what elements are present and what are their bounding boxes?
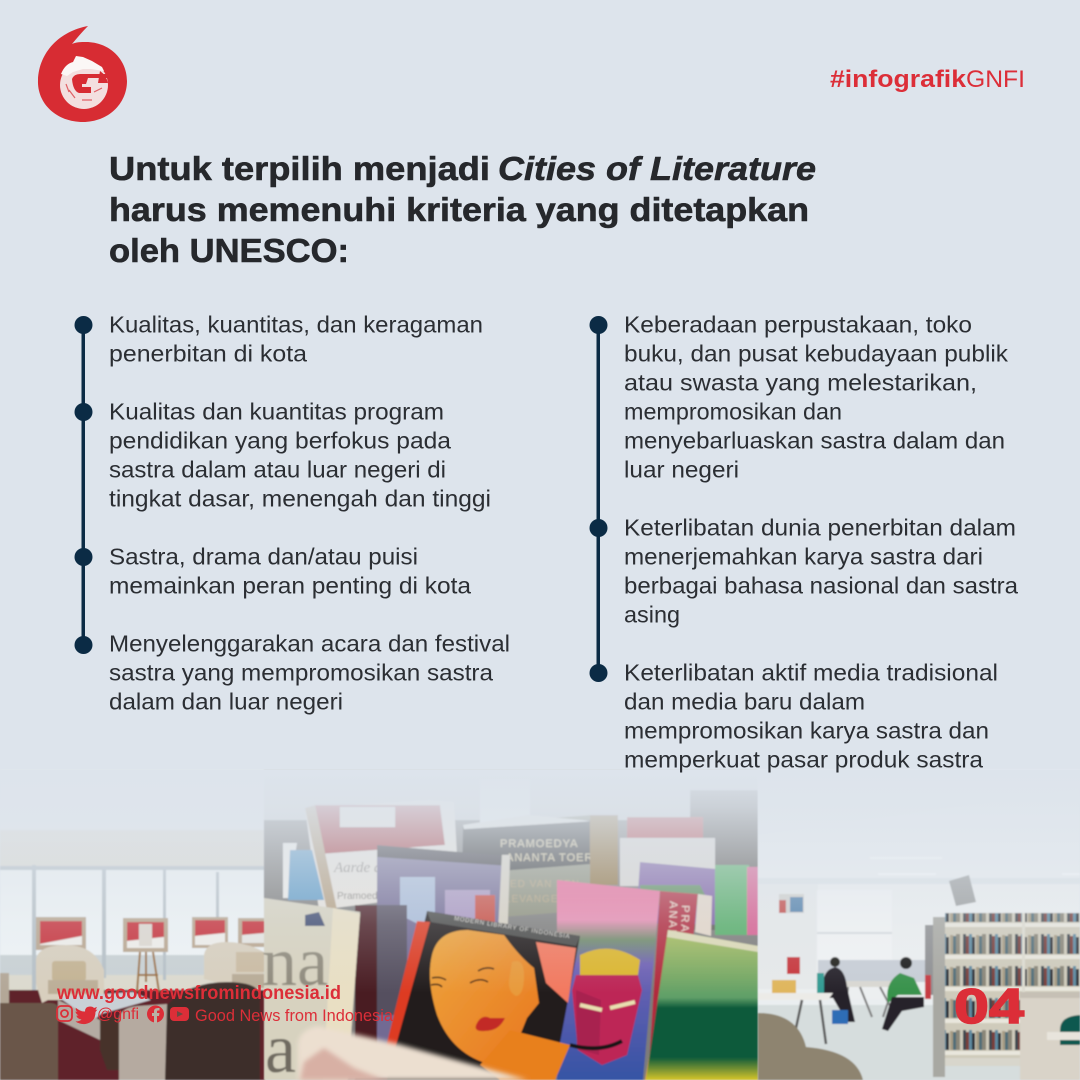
criteria: libraries: buku, dan pusat kebudayaan publik (624, 340, 1008, 366)
criteria: events: Menyelenggarakan acara dan festival (109, 630, 510, 656)
page number: 04 (954, 980, 1024, 1034)
readers at table (817, 957, 931, 1031)
social footer (57, 1006, 394, 1025)
criteria: libraries: luar negeri (624, 456, 739, 482)
ceiling lights (870, 858, 1080, 874)
book: grey Pramoedya: ED VAN EEN (510, 879, 580, 890)
criteria: role of literature: Sastra, drama dan/atau puisi (109, 543, 418, 569)
photo: books: PRA (678, 905, 691, 934)
criteria: translation: menerjemahkan karya sastra dari (624, 543, 983, 569)
criteria: libraries: menyebarluaskan sastra dalam dan (624, 427, 1005, 453)
book: grey Pramoedya: LEVANGENE (505, 894, 574, 905)
website url: www.goodnewsfromindonesia.id (56, 983, 341, 1004)
book: woman (382, 911, 580, 1080)
criteria: libraries (624, 311, 1008, 482)
foreground chairs (0, 1003, 58, 1080)
photo: books: ANAN (666, 901, 679, 940)
timeline: right (590, 316, 608, 682)
photo: lounge with paintings (0, 770, 265, 1080)
photo: books (262, 770, 758, 1080)
criteria: libraries: mempromosikan dan (624, 398, 842, 424)
criteria: education: tingkat dasar, menengah dan tinggi (109, 485, 491, 511)
criteria: libraries: Keberadaan perpustakaan, toko (624, 311, 972, 337)
criteria: education (109, 398, 491, 511)
criteria: events: sastra yang mempromosikan sastra (109, 659, 494, 685)
painting 1 (36, 917, 86, 950)
timeline: left (74, 316, 92, 654)
criteria: media: dan media baru dalam (624, 688, 865, 714)
criteria: events: dalam dan luar negeri (109, 688, 343, 714)
criteria: role of literature (109, 543, 472, 598)
bookshelves (925, 913, 1080, 1077)
criteria: translation (624, 514, 1019, 627)
shelf cubes (779, 894, 804, 974)
desks and stool (758, 980, 1080, 1080)
criteria: media: Keterlibatan aktif media tradisional (624, 659, 998, 685)
armchairs (36, 945, 104, 1003)
icon: facebook (147, 1006, 164, 1023)
logo (38, 26, 127, 122)
photo: library (758, 770, 1080, 1080)
criteria: publishing: penerbitan di kota (109, 340, 308, 366)
book: cream cover (262, 898, 360, 1080)
channel name: Good News from Indonesia (195, 1006, 394, 1025)
hashtag: GNFI (966, 66, 1025, 93)
criteria: education: sastra dalam atau luar negeri di (109, 456, 446, 482)
title: Untuk terpilih menjadi (109, 151, 490, 188)
book: white Aarde (283, 800, 459, 910)
book: cream cover: na (262, 924, 328, 1001)
painting 2 (123, 918, 168, 952)
criteria: translation: berbagai bahasa nasional dan sastra (624, 572, 1019, 598)
criteria: publishing: Kualitas, kuantitas, dan keragaman (109, 311, 483, 337)
book: grey Pramoedya (462, 815, 593, 920)
criteria: media: mempromosikan karya sastra dan (624, 717, 989, 743)
criteria: media (624, 659, 998, 772)
criteria: events (109, 630, 510, 714)
hashtag (830, 66, 1025, 93)
easel (137, 952, 159, 992)
book: mask (557, 880, 660, 1080)
criteria: role of literature: memainkan peran penting di kota (109, 572, 472, 598)
book: purple (377, 845, 509, 1077)
criteria: media: memperkuat pasar produk sastra (624, 746, 984, 772)
logo emblem (60, 56, 108, 109)
book: green (646, 930, 758, 1080)
book: grey Pramoedya: PRAMOEDYA (500, 838, 578, 850)
photo fade overlay (0, 770, 1080, 1080)
book: woman: MODERN LIBRARY OF INDONESIA (454, 916, 571, 940)
book: grey Pramoedya: ANANTA TOER (506, 852, 593, 864)
title (109, 151, 816, 270)
criteria: libraries: atau swasta yang melestarikan, (624, 369, 977, 395)
icon: youtube (170, 1007, 189, 1021)
painting 4 (238, 918, 265, 947)
book: purple and green stripe (636, 862, 728, 925)
icon: twitter (76, 1006, 98, 1024)
criteria: translation: Keterlibatan dunia penerbitan dalam (624, 514, 1016, 540)
criteria: publishing (109, 311, 483, 366)
criteria: education: pendidikan yang berfokus pada (109, 427, 452, 453)
book: blurred front (298, 1026, 528, 1080)
title: oleh UNESCO: (109, 233, 349, 270)
icon: instagram (57, 1006, 72, 1021)
criteria: translation: asing (624, 601, 680, 627)
projector (949, 875, 976, 906)
title: harus memenuhi kriteria yang ditetapkan (109, 192, 809, 229)
handle: @gnfi (97, 1006, 139, 1023)
book: white Aarde: Aarde d (333, 860, 382, 876)
criteria: education: Kualitas dan kuantitas program (109, 398, 444, 424)
title: Cities of Literature (498, 151, 816, 188)
hashtag: #infografik (830, 66, 966, 93)
coffee table (58, 992, 151, 1021)
painting 3 (192, 917, 228, 948)
book: white Aarde: Pramoedya (337, 891, 389, 902)
